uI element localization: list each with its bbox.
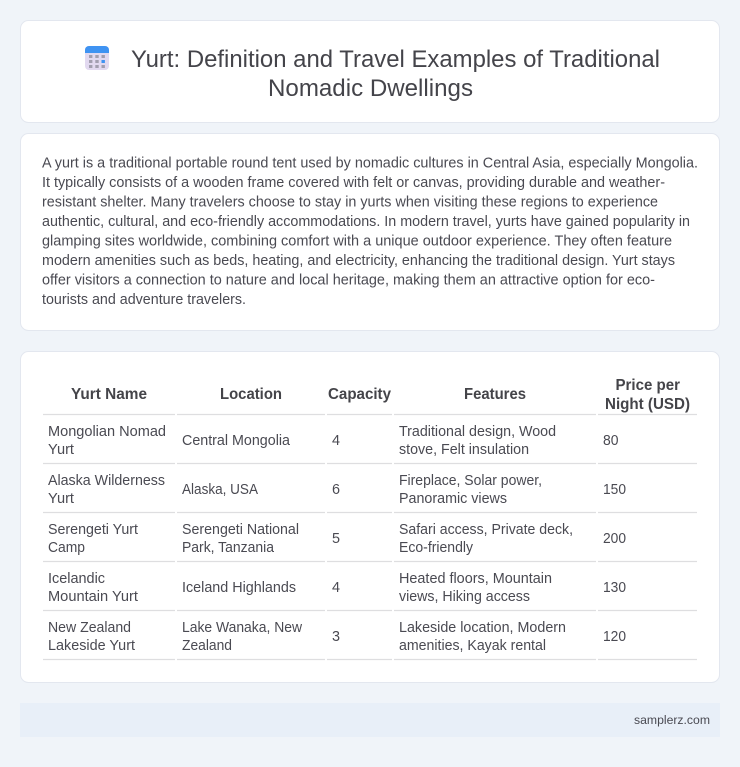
table row: Icelandic Mountain Yurt: 4 bbox=[332, 580, 340, 596]
table row: Serengeti Yurt Camp: Serengeti Yurt bbox=[48, 522, 138, 538]
table row: Icelandic Mountain Yurt: Iceland Highlands bbox=[182, 580, 296, 596]
table row: Alaska Wilderness Yurt: Panoramic views bbox=[399, 491, 507, 507]
text block: description paragraph: offer visitors a connection to nature and local heritage, making them an attractive option for eco- bbox=[42, 272, 655, 288]
table header bbox=[71, 377, 690, 413]
table row: Alaska Wilderness Yurt: 150 bbox=[603, 482, 626, 498]
title: Yurt: Definition and Travel Examples of Traditional bbox=[131, 46, 660, 73]
table row: New Zealand Lakeside Yurt: Lakeside Yurt bbox=[48, 638, 135, 654]
table row: Mongolian Nomad Yurt: 80 bbox=[603, 433, 618, 449]
table row: Serengeti Yurt Camp: Safari access, Private deck, bbox=[399, 522, 573, 538]
table row: New Zealand Lakeside Yurt: 3 bbox=[332, 629, 340, 645]
table row: Mongolian Nomad Yurt bbox=[48, 424, 618, 458]
table row: Mongolian Nomad Yurt: 4 bbox=[332, 433, 340, 449]
table row: Alaska Wilderness Yurt: 6 bbox=[332, 482, 340, 498]
table row: Serengeti Yurt Camp bbox=[48, 522, 626, 556]
text block: description paragraph: tourists and adventure travelers. bbox=[42, 292, 246, 308]
table row: Mongolian Nomad Yurt: Traditional design, Wood bbox=[399, 424, 556, 440]
table header: Night (USD) bbox=[605, 396, 690, 413]
title bbox=[131, 46, 660, 102]
table row: Serengeti Yurt Camp: Serengeti National bbox=[182, 522, 299, 538]
table row: Mongolian Nomad Yurt: Yurt bbox=[48, 442, 74, 458]
table row: Serengeti Yurt Camp: Eco-friendly bbox=[399, 540, 474, 556]
footer bar bbox=[20, 703, 720, 737]
table row: Alaska Wilderness Yurt: Alaska, USA bbox=[182, 482, 258, 498]
icon: calendar bbox=[85, 46, 109, 70]
table header: Price per bbox=[616, 377, 680, 394]
panel: title card bbox=[20, 20, 720, 122]
table row: New Zealand Lakeside Yurt: Zealand bbox=[182, 638, 232, 654]
table row: Icelandic Mountain Yurt: Icelandic bbox=[48, 571, 105, 587]
table row: Icelandic Mountain Yurt bbox=[48, 571, 626, 605]
table header: Yurt Name bbox=[71, 386, 147, 403]
table row: Alaska Wilderness Yurt bbox=[48, 473, 626, 507]
text block: description paragraph: resistant shelter. Many travelers choose to stay in yurts when visiting these regions to experience bbox=[42, 194, 658, 210]
table header: Capacity bbox=[328, 386, 391, 403]
table row: Mongolian Nomad Yurt: Mongolian Nomad bbox=[48, 424, 166, 440]
text block: description paragraph bbox=[42, 156, 698, 308]
table row: New Zealand Lakeside Yurt: Lake Wanaka, New bbox=[182, 620, 303, 636]
text block: description paragraph: authentic, cultural, and eco-friendly accommodations. In modern travel, yurts have gained popularity in bbox=[42, 214, 690, 230]
table row: Alaska Wilderness Yurt: Fireplace, Solar power, bbox=[399, 473, 542, 489]
title: Nomadic Dwellings bbox=[268, 75, 473, 102]
table row: New Zealand Lakeside Yurt: amenities, Kayak rental bbox=[399, 638, 546, 654]
table header: Location bbox=[220, 386, 282, 403]
table row: Mongolian Nomad Yurt: stove, Felt insulation bbox=[399, 442, 529, 458]
table row: New Zealand Lakeside Yurt: New Zealand bbox=[48, 620, 131, 636]
text block: description paragraph: modern amenities such as beds, heating, and electricity, enhancing the traditional design. Yurt stays bbox=[42, 253, 675, 269]
table row: Serengeti Yurt Camp: Camp bbox=[48, 540, 85, 556]
table header: Features bbox=[464, 386, 526, 403]
table row: Icelandic Mountain Yurt: Mountain Yurt bbox=[48, 589, 138, 605]
table row: Icelandic Mountain Yurt: Heated floors, Mountain bbox=[399, 571, 552, 587]
text block: description paragraph: A yurt is a traditional portable round tent used by nomadic cultures in Central Asia, especially Mongolia. bbox=[42, 156, 698, 172]
panel: yurt table bbox=[20, 352, 720, 682]
table row: Mongolian Nomad Yurt: Central Mongolia bbox=[182, 433, 290, 449]
text block: description paragraph: glamping sites worldwide, combining comfort with a unique outdoor experience. They often feature bbox=[42, 234, 672, 250]
table row: Icelandic Mountain Yurt: 130 bbox=[603, 580, 626, 596]
table row: Icelandic Mountain Yurt: views, Hiking access bbox=[399, 589, 530, 605]
table row: Alaska Wilderness Yurt: Alaska Wilderness bbox=[48, 473, 165, 489]
footer text: samplerz.com bbox=[634, 713, 710, 727]
text block: description paragraph: It typically consists of a wooden frame covered with felt or canvas, providing durable and weather- bbox=[42, 175, 665, 191]
table row: New Zealand Lakeside Yurt: Lakeside location, Modern bbox=[399, 620, 566, 636]
table row: Alaska Wilderness Yurt: Yurt bbox=[48, 491, 74, 507]
table row: Serengeti Yurt Camp: 200 bbox=[603, 531, 626, 547]
panel: description bbox=[20, 134, 720, 330]
table row: Serengeti Yurt Camp: 5 bbox=[332, 531, 340, 547]
table row: New Zealand Lakeside Yurt bbox=[48, 620, 626, 654]
table row: New Zealand Lakeside Yurt: 120 bbox=[603, 629, 626, 645]
table row: Serengeti Yurt Camp: Park, Tanzania bbox=[182, 540, 274, 556]
